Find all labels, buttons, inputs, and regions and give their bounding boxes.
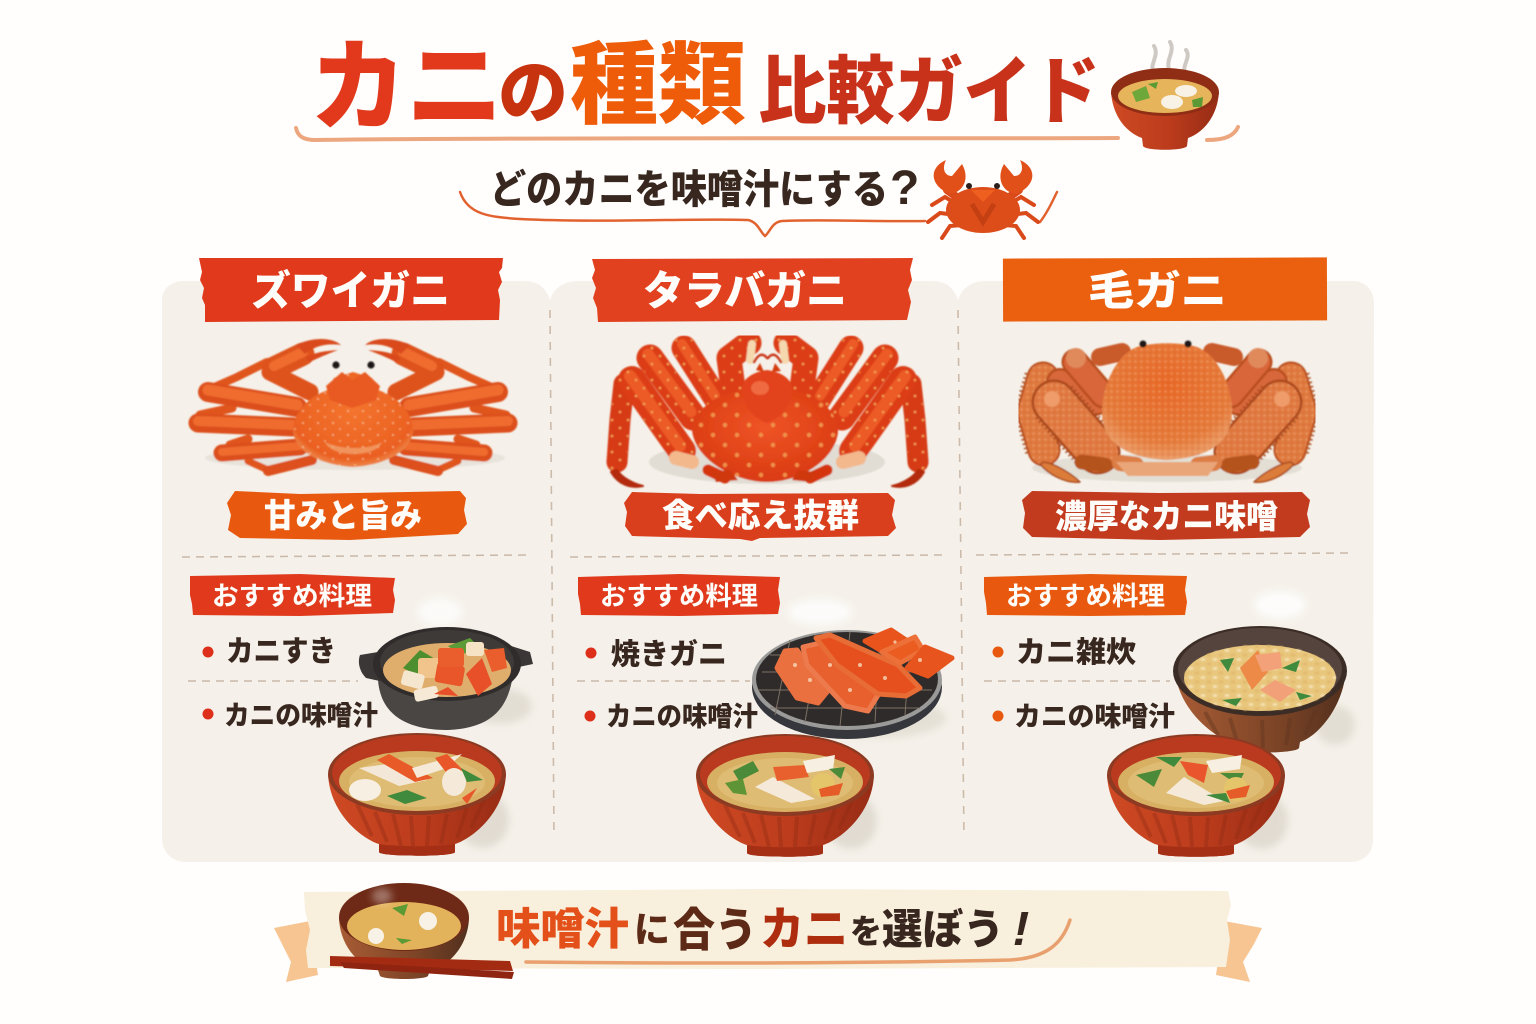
crab illustration: snow crab xyxy=(198,339,508,471)
divider xyxy=(570,555,945,557)
list item: カニ雑炊: カニ雑炊 xyxy=(1016,636,1136,669)
banner message: を xyxy=(850,913,882,950)
title xyxy=(310,32,1100,144)
icon: miso soup bowl with chopsticks xyxy=(330,883,514,979)
title: カニ xyxy=(310,32,503,144)
tag: 濃厚なカニ味噌 xyxy=(1022,491,1310,540)
dish: crab sukiyaki hot pot xyxy=(359,598,533,730)
title: 比較ガイド xyxy=(758,50,1100,133)
tag: 濃厚なカニ味噌: 濃厚なカニ味噌 xyxy=(1055,498,1278,535)
list item: カニの味噌汁: カニの味噌汁 xyxy=(606,702,758,732)
panel: ズワイガニ xyxy=(182,258,533,856)
tag: 食べ応え抜群: 食べ応え抜群 xyxy=(662,497,859,534)
crab illustration: king crab xyxy=(611,343,924,487)
title: の xyxy=(498,54,568,132)
banner message: 合う xyxy=(673,904,757,956)
header ribbon xyxy=(1003,257,1327,322)
dish: crab miso soup bowl xyxy=(328,733,509,856)
icon: small crab xyxy=(928,160,1038,238)
tag: おすすめ料理 xyxy=(984,574,1187,616)
panel: タラバガニ xyxy=(570,258,952,857)
banner message: に xyxy=(634,909,670,950)
subtitle: どのカニを味噌汁にする xyxy=(490,168,888,212)
tag: おすすめ料理: おすすめ料理 xyxy=(212,581,372,611)
panel: 毛ガニ xyxy=(976,257,1355,857)
banner message xyxy=(496,902,1035,956)
dish: crab rice porridge bowl xyxy=(1173,591,1355,752)
tag: おすすめ料理 xyxy=(578,574,780,616)
list item: カニすき: カニすき xyxy=(226,636,336,668)
crab illustration: horsehair crab xyxy=(1032,340,1302,482)
subtitle: ? xyxy=(890,162,919,215)
subtitle bracket xyxy=(460,192,1057,236)
list item: カニの味噌汁: カニの味噌汁 xyxy=(1014,702,1175,732)
header ribbon: 毛ガニ xyxy=(1088,268,1227,314)
banner ribbon xyxy=(304,889,1231,969)
header ribbon xyxy=(199,258,503,322)
divider xyxy=(182,555,532,557)
dish: crab miso soup bowl xyxy=(1107,734,1288,857)
tag: おすすめ料理 xyxy=(190,574,395,616)
list item: 焼きガニ: 焼きガニ xyxy=(611,638,727,671)
title: 種類 xyxy=(570,36,746,136)
list item: カニの味噌汁: カニの味噌汁 xyxy=(224,701,378,731)
banner tails xyxy=(274,921,318,982)
tag: 甘みと旨み: 甘みと旨み xyxy=(264,497,422,534)
panel: cards background xyxy=(162,281,1374,862)
banner underline xyxy=(526,920,1070,963)
icon: miso soup bowl with steam xyxy=(1111,42,1219,150)
dish: crab miso soup bowl xyxy=(696,734,877,857)
dish: grilled crab on plate xyxy=(752,599,952,739)
banner message: カニ xyxy=(760,903,848,955)
header ribbon: タラバガニ xyxy=(643,268,847,314)
divider xyxy=(976,553,1350,555)
title underline xyxy=(296,127,1238,140)
tag: おすすめ料理: おすすめ料理 xyxy=(1006,581,1165,611)
banner message: 味噌汁 xyxy=(496,905,629,954)
header ribbon: ズワイガニ xyxy=(251,268,450,314)
banner message: ! xyxy=(1008,902,1035,956)
bottom banner xyxy=(274,883,1262,982)
tag: 食べ応え抜群 xyxy=(624,492,896,541)
banner message: 選ぼう xyxy=(882,906,1004,953)
header ribbon xyxy=(592,258,913,322)
tag: おすすめ料理: おすすめ料理 xyxy=(600,581,758,611)
tag: 甘みと旨み xyxy=(227,491,467,540)
